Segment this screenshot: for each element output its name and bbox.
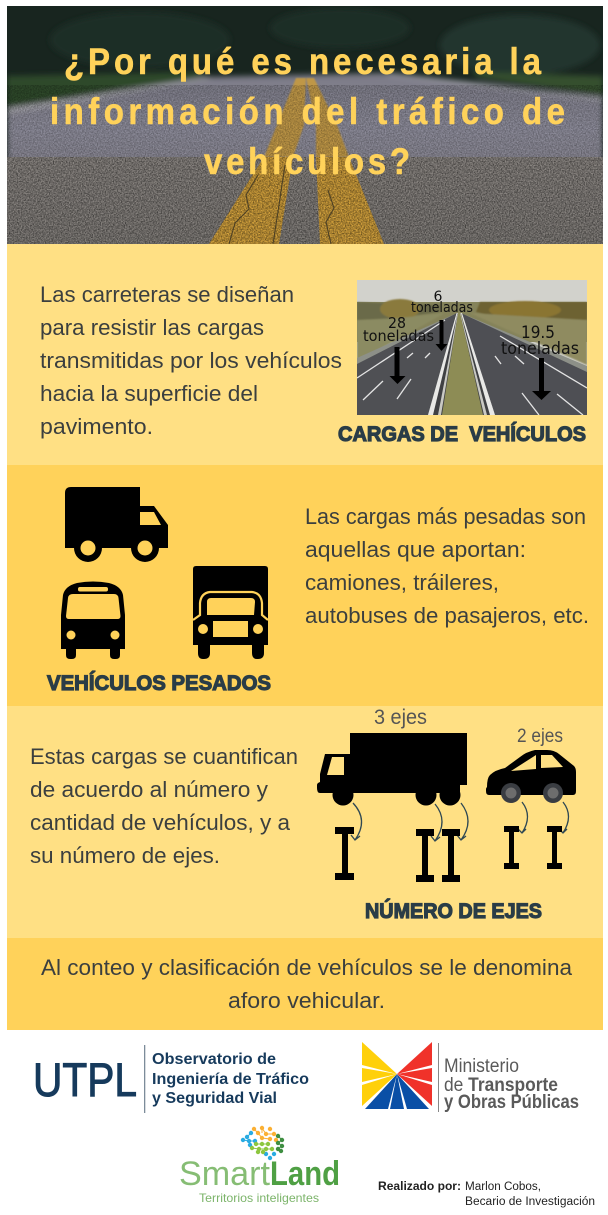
logo: SmartLand: Territorios inteligentes <box>199 1191 319 1205</box>
icon: car <box>486 750 576 803</box>
photo: highway with load labels: 6 <box>434 289 443 305</box>
photo: highway with load labels: 19.5 <box>521 323 555 343</box>
text block: cargas más pesadas: camiones, tráileres, <box>305 570 499 595</box>
icon: brain of dots <box>241 1126 284 1160</box>
label: 3 ejes: 3 ejes <box>374 706 427 729</box>
text block: carreteras: hacia la superficie del <box>40 381 258 406</box>
arrows: load direction <box>390 320 551 400</box>
panel: vehículos pesados <box>7 465 603 706</box>
text block: cargas más pesadas <box>305 504 589 628</box>
logo: Ministerio de Transporte y Obras Públicas: y Obras Públicas <box>444 1092 579 1113</box>
text block: carreteras: pavimento. <box>40 414 153 439</box>
text block: cargas más pesadas: autobuses de pasajeros, etc. <box>305 603 589 628</box>
title <box>50 41 565 182</box>
credit: Realizado por <box>378 1181 595 1208</box>
logo: UTPL observatorio: UTPL <box>33 1053 137 1106</box>
text block: carreteras: transmitidas por los vehículos <box>40 348 342 373</box>
icon: three-axle truck <box>317 733 467 806</box>
photo: highway with load labels: 28 <box>388 314 406 332</box>
panel: cargas de vehículos <box>7 244 603 465</box>
text block: carreteras: para resistir las cargas <box>40 315 264 340</box>
photo: highway with load labels: toneladas <box>411 300 473 316</box>
logo: Ministerio de Transporte y Obras Públicas: de Transporte <box>444 1075 558 1096</box>
icon: bus front view <box>61 582 125 659</box>
title: información del tráfico de <box>50 91 565 132</box>
road centre lines <box>209 78 384 244</box>
panel: aforo vehicular <box>7 938 603 1030</box>
text block: cuantificación: Estas cargas se cuantifican <box>30 744 298 769</box>
photo: highway with load labels: toneladas <box>501 339 579 359</box>
heading: vehículos pesados: VEHÍCULOS PESADOS <box>47 672 271 695</box>
logo: SmartLand: Land <box>270 1155 340 1193</box>
credit: Realizado por: Realizado por: <box>378 1181 461 1193</box>
heading: cargas de vehículos: CARGAS DE VEHÍCULOS <box>338 423 586 446</box>
title: vehículos? <box>204 141 410 182</box>
icon: truck front view <box>193 566 268 659</box>
photo: road with double yellow lines <box>7 6 603 244</box>
text block: cuantificación <box>30 744 298 868</box>
panel: header photo and title <box>7 6 603 244</box>
logo: UTPL observatorio: y Seguridad Vial <box>152 1090 277 1107</box>
icon: truck side view <box>65 487 168 562</box>
panel: aforo vehicular: Al conteo y clasificación de vehículos se le denomina <box>41 955 573 980</box>
credit: Realizado por: Becario de Investigación <box>465 1196 595 1208</box>
logo: SmartLand <box>179 1126 340 1205</box>
logo: UTPL observatorio <box>33 1045 309 1113</box>
credit: Realizado por: Marlon Cobos, <box>465 1181 541 1193</box>
logo: UTPL observatorio: Observatorio de <box>152 1051 276 1068</box>
text block: cuantificación: su número de ejes. <box>30 843 220 868</box>
photo: highway with load labels: toneladas <box>363 327 434 345</box>
label: 2 ejes: 2 ejes <box>517 726 563 747</box>
text block: carreteras: Las carreteras se diseñan <box>40 282 294 307</box>
icons: axle symbols <box>335 826 562 882</box>
title: ¿Por qué es necesaria la <box>64 41 541 82</box>
panel: aforo vehicular: aforo vehicular. <box>228 988 385 1013</box>
arrows: wheels to axles <box>351 802 568 841</box>
text block: carreteras <box>40 282 342 439</box>
logo: Ministerio de Transporte y Obras Públicas: Ministerio <box>444 1056 519 1077</box>
carriageways <box>357 313 457 415</box>
text block: cargas más pesadas: aquellas que aportan: <box>305 537 526 562</box>
heading: número de ejes: NÚMERO DE EJES <box>365 899 542 923</box>
text block: cuantificación: cantidad de vehículos, y a <box>30 810 291 835</box>
logo: Ministerio de Transporte y Obras Públicas <box>362 1042 579 1113</box>
logo: UTPL observatorio: Ingeniería de Tráfico <box>152 1071 309 1088</box>
photo: highway with load labels <box>357 280 587 415</box>
text block: cargas más pesadas: Las cargas más pesadas son <box>305 504 586 529</box>
logo: SmartLand: Smart <box>179 1155 271 1193</box>
text block: cuantificación: de acuerdo al número y <box>30 777 268 802</box>
panel: número de ejes <box>7 706 603 938</box>
